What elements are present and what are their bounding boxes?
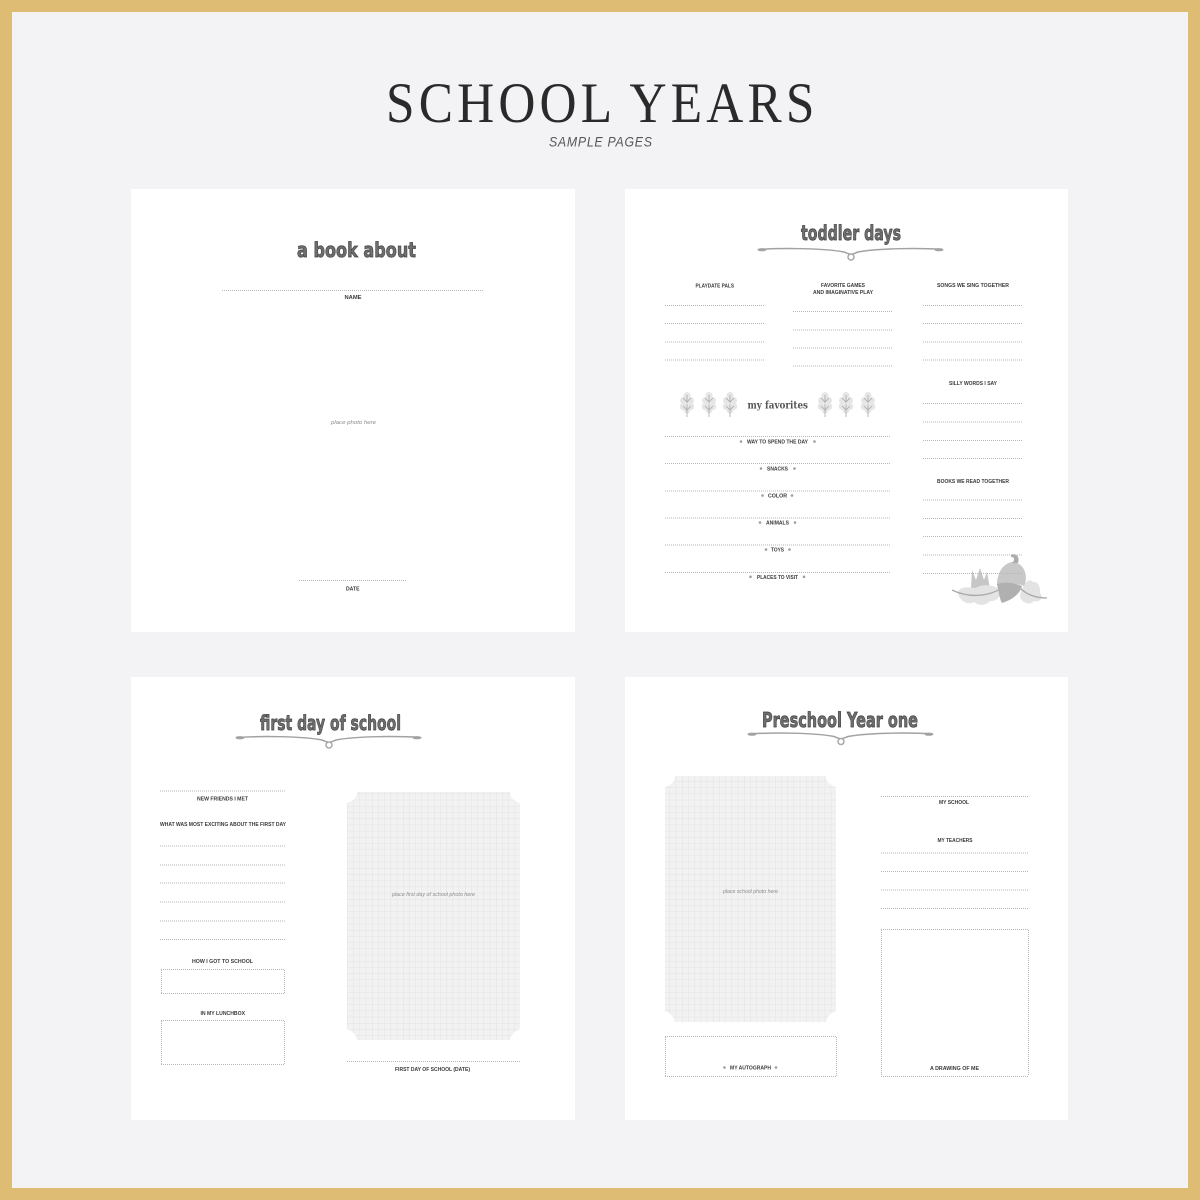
photo grid placeholder: place school photo here <box>722 889 778 895</box>
my teachers block <box>881 838 1028 908</box>
icons: right leaves <box>818 392 875 417</box>
most exciting block <box>160 822 286 940</box>
heading: a book about: a book about <box>297 238 416 262</box>
autograph box: MY AUTOGRAPH <box>730 1066 771 1072</box>
my teachers block: MY TEACHERS <box>938 838 973 844</box>
in my lunchbox <box>161 1011 285 1064</box>
column: favorite games: FAVORITE GAMES <box>821 283 865 289</box>
new friends label: NEW FRIENDS I MET <box>197 796 249 802</box>
date line <box>299 580 406 582</box>
favorites list <box>665 436 890 581</box>
drawing box: A DRAWING OF ME <box>930 1066 979 1072</box>
autograph box <box>665 1036 837 1076</box>
my school label: MY SCHOOL <box>939 800 970 806</box>
favorites list: COLOR <box>768 494 787 500</box>
subtitle: SAMPLE PAGES <box>549 134 652 150</box>
date label: DATE <box>346 586 360 592</box>
photo grid placeholder <box>665 776 836 1022</box>
my school line <box>881 796 1028 798</box>
heading: my favorites: my favorites <box>748 400 808 412</box>
column: books we read together <box>923 479 1023 574</box>
heading: toddler days: toddler days <box>801 221 901 245</box>
how I got to school <box>161 959 285 994</box>
flourish <box>748 733 934 744</box>
column: playdate pals: PLAYDATE PALS <box>696 284 734 290</box>
date line <box>347 1060 520 1062</box>
name label: NAME <box>344 295 362 301</box>
name line <box>222 290 484 292</box>
illustration: acorn and leaves <box>952 554 1047 605</box>
favorites list: ANIMALS <box>766 520 789 526</box>
column: books we read together: BOOKS WE READ TOGETHER <box>937 479 1009 485</box>
panel: a book about <box>131 189 575 632</box>
photo grid placeholder: place first day of school photo here <box>391 892 475 898</box>
column: playdate pals <box>665 284 765 360</box>
heading: preschool year one: Preschool Year one <box>762 708 918 732</box>
photo placeholder text: place photo here <box>330 420 376 426</box>
column: favorite games: AND IMAGINATIVE PLAY <box>813 290 873 296</box>
favorites list: TOYS <box>771 548 784 554</box>
title: SCHOOL YEARS <box>386 72 814 135</box>
panel: preschool year one <box>625 677 1068 1120</box>
column: silly words <box>923 381 1023 458</box>
column: songs we sing together <box>923 283 1023 360</box>
column: silly words: SILLY WORDS I SAY <box>949 381 997 387</box>
panel: first day of school <box>131 677 575 1120</box>
photo grid placeholder <box>347 792 520 1040</box>
new friends line <box>160 790 285 792</box>
heading: first day of school: first day of school <box>260 711 401 735</box>
drawing box <box>881 930 1029 1076</box>
favorites list: SNACKS <box>767 466 788 472</box>
flourish <box>236 736 422 748</box>
panel: toddler days <box>625 189 1068 632</box>
column: songs we sing together: SONGS WE SING TOGETHER <box>937 283 1009 289</box>
most exciting block: WHAT WAS MOST EXCITING ABOUT THE FIRST DAY <box>160 822 286 828</box>
date label: FIRST DAY OF SCHOOL (DATE) <box>395 1067 470 1073</box>
icons: left leaves <box>680 392 737 417</box>
how I got to school: HOW I GOT TO SCHOOL <box>192 959 254 965</box>
column: favorite games <box>793 283 893 366</box>
favorites list: PLACES TO VISIT <box>757 575 799 581</box>
in my lunchbox: IN MY LUNCHBOX <box>200 1011 245 1017</box>
favorites list: WAY TO SPEND THE DAY <box>747 440 808 446</box>
flourish <box>758 248 944 260</box>
